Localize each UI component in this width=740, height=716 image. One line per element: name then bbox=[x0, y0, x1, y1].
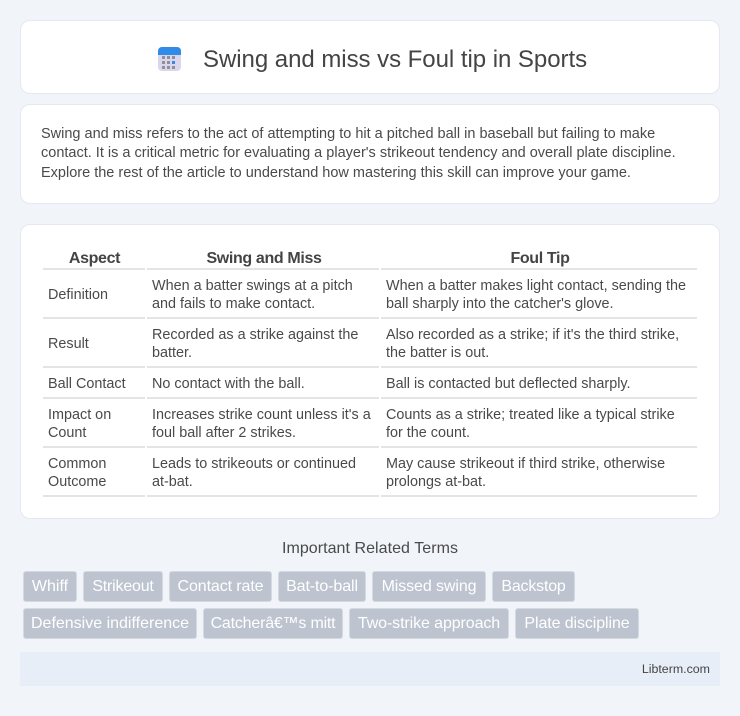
tag: Strikeout bbox=[92, 578, 154, 595]
intro text: contact. It is a critical metric for evaluating a player's strikeout tendency and overall plate discipline. bbox=[41, 145, 676, 161]
table header: Foul Tip bbox=[510, 250, 570, 267]
row: definition: When a batter swings at a pitch bbox=[152, 278, 353, 294]
tag: Whiff bbox=[32, 578, 68, 595]
row: definition bbox=[48, 278, 686, 312]
row: result: Recorded as a strike against the bbox=[152, 327, 358, 343]
tag: Bat-to-ball bbox=[286, 578, 358, 595]
row: impact on count: Count bbox=[48, 425, 86, 441]
tag bbox=[203, 608, 343, 639]
row: ball contact bbox=[48, 376, 631, 392]
tag bbox=[83, 571, 163, 602]
tag: Catcherâ€™s mitt bbox=[211, 615, 335, 632]
tag bbox=[169, 571, 272, 602]
row: ball contact: Ball Contact bbox=[48, 376, 126, 392]
row: result: Result bbox=[48, 336, 89, 352]
tag bbox=[278, 571, 366, 602]
footer credit: Libterm.com bbox=[642, 662, 710, 676]
icon: calendar bbox=[158, 47, 181, 71]
intro text: Explore the rest of the article to understand how mastering this skill can improve your game. bbox=[41, 165, 631, 181]
row: definition: When a batter makes light contact, sending the bbox=[386, 278, 686, 294]
table header: Aspect bbox=[69, 250, 120, 267]
intro text: Swing and miss refers to the act of attempting to hit a pitched ball in baseball but failing to make bbox=[41, 126, 655, 142]
title: Swing and miss vs Foul tip in Sports bbox=[203, 46, 587, 73]
tag: Missed swing bbox=[382, 578, 476, 595]
row: common outcome: Common bbox=[48, 456, 106, 472]
tag bbox=[23, 608, 197, 639]
row: impact on count: Increases strike count unless it's a bbox=[152, 407, 371, 423]
row: result: Also recorded as a strike; if it's the third strike, bbox=[386, 327, 679, 343]
row: definition: and fails to make contact. bbox=[152, 296, 315, 312]
tag: Defensive indifference bbox=[31, 615, 189, 632]
tag bbox=[23, 571, 77, 602]
table card bbox=[20, 224, 720, 519]
row: common outcome: May cause strikeout if third strike, otherwise bbox=[386, 456, 665, 472]
row: impact on count: Counts as a strike; treated like a typical strike bbox=[386, 407, 675, 423]
row: impact on count: Impact on bbox=[48, 407, 111, 423]
row: common outcome: at-bat. bbox=[152, 474, 193, 490]
related terms heading: Important Related Terms bbox=[282, 540, 458, 557]
row: ball contact: Ball is contacted but deflected sharply. bbox=[386, 376, 631, 392]
row: common outcome bbox=[48, 456, 665, 490]
tag bbox=[372, 571, 486, 602]
intro text bbox=[41, 126, 676, 181]
row: result bbox=[48, 327, 679, 361]
intro card bbox=[20, 104, 720, 204]
table bbox=[43, 250, 697, 497]
row: impact on count: foul ball after 2 strikes. bbox=[152, 425, 296, 441]
row: ball contact: No contact with the ball. bbox=[152, 376, 305, 392]
row: impact on count: for the count. bbox=[386, 425, 470, 441]
header card bbox=[20, 20, 720, 94]
row: definition: ball sharply into the catcher's glove. bbox=[386, 296, 614, 312]
row: common outcome: prolongs at-bat. bbox=[386, 474, 486, 490]
row: common outcome: Leads to strikeouts or continued bbox=[152, 456, 356, 472]
tag bbox=[492, 571, 575, 602]
table header bbox=[69, 250, 570, 267]
tag bbox=[515, 608, 639, 639]
table header: Swing and Miss bbox=[206, 250, 322, 267]
row: common outcome: Outcome bbox=[48, 474, 106, 490]
tag bbox=[349, 608, 509, 639]
row: definition: Definition bbox=[48, 287, 108, 303]
tag: Backstop bbox=[501, 578, 566, 595]
row: result: batter. bbox=[152, 345, 192, 361]
footer bar bbox=[20, 652, 720, 686]
tag: Contact rate bbox=[178, 578, 263, 595]
tag: Two-strike approach bbox=[358, 615, 500, 632]
row: result: the batter is out. bbox=[386, 345, 489, 361]
related terms tags bbox=[23, 571, 639, 639]
row: impact on count bbox=[48, 407, 675, 441]
tag: Plate discipline bbox=[524, 615, 630, 632]
